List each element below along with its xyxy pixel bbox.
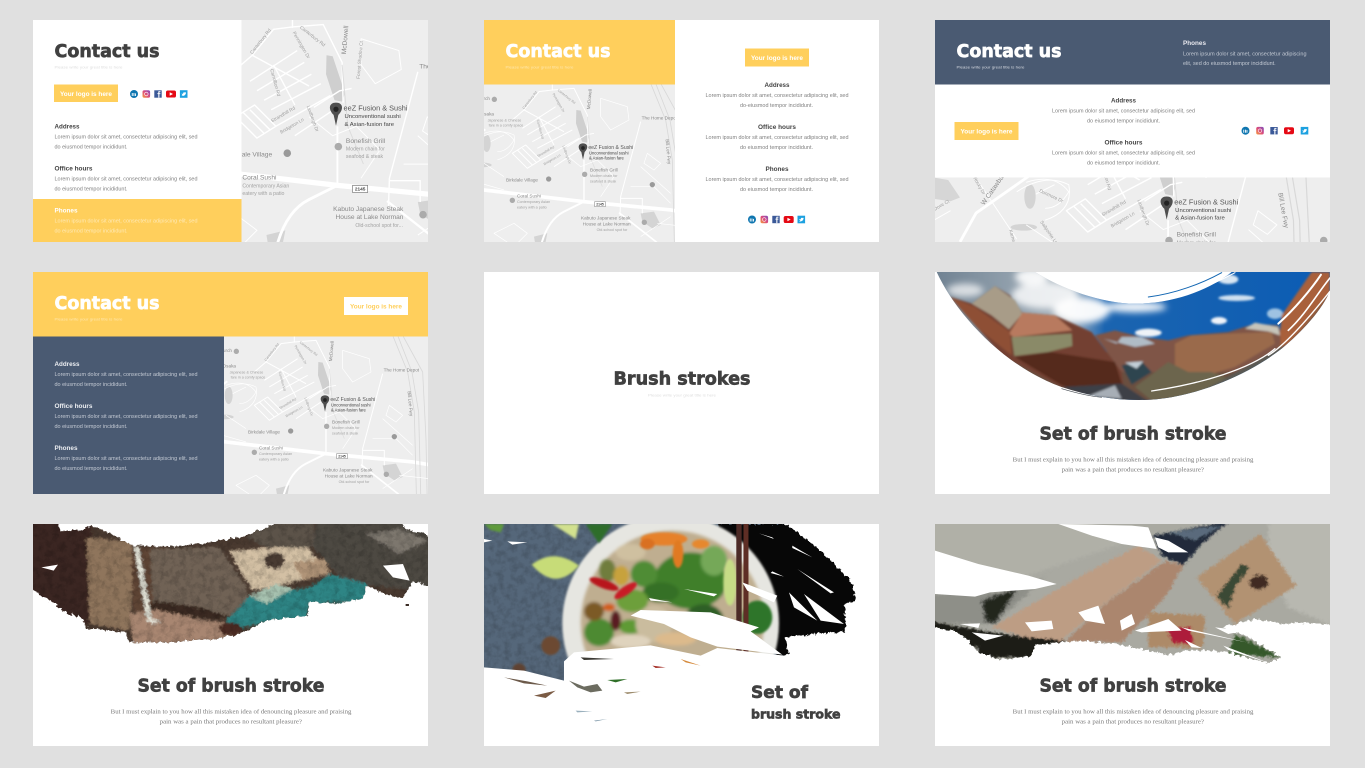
- map: Strandhill Rd: [270, 105, 297, 124]
- title: Set of brush stroke: [138, 676, 324, 696]
- photo: canyon in crescent brush stroke: [936, 272, 1330, 400]
- phones block: do eiusmod tempor incididunt.: [54, 466, 128, 472]
- map: [475, 84, 678, 242]
- logo badge: [344, 297, 408, 315]
- map: 2145: [596, 202, 604, 206]
- title: Contact us: [956, 41, 1062, 62]
- map: Osaka: [223, 363, 236, 368]
- office hours block: [54, 166, 198, 193]
- map: Canterbury Rd: [298, 25, 326, 49]
- social icons: [1242, 127, 1308, 135]
- map: Bridgeton Ln: [285, 405, 303, 418]
- map: Contemporary Asian: [242, 183, 289, 189]
- map: seafood & steak: [590, 179, 616, 183]
- map: Birkdale Village: [248, 429, 280, 434]
- phones block: do eiusmod tempor incididunt.: [740, 187, 813, 193]
- map: Carrollton Rd: [278, 371, 287, 391]
- map: Canterbury Rd: [299, 340, 318, 357]
- social icons: [748, 216, 805, 224]
- phones block: [1183, 40, 1307, 67]
- office hours block: Lorem ipsum dolor sit amet, consectetur adipiscing elit, sed: [54, 177, 198, 183]
- yellow header: [484, 20, 675, 84]
- map: McDowell: [586, 89, 593, 109]
- dark header: [935, 20, 1330, 84]
- title: Set of brush stroke: [1040, 424, 1226, 444]
- panel: contact slide with yellow header over map, centered details: [475, 20, 879, 242]
- logo badge: Your logo is here: [60, 91, 113, 98]
- map: W Catawba Ave: [980, 164, 1013, 207]
- map: Canterbury Rd: [249, 27, 273, 56]
- map: [217, 336, 428, 494]
- map: McDowell: [341, 25, 350, 55]
- office hours block: do eiusmod tempor incididunt.: [54, 187, 128, 193]
- panel: food bowl photo slide: [484, 524, 879, 746]
- photo: noodle bowl with ink brush stroke: [484, 524, 856, 722]
- panel: crescent canyon photo slide: [935, 272, 1330, 494]
- office hours block: Office hours: [1104, 139, 1143, 146]
- map: Strandhill Rd: [1101, 199, 1128, 218]
- address block: Lorem ipsum dolor sit amet, consectetur adipiscing elit, sed: [54, 372, 198, 378]
- panel: contact slide with dark header and map at bottom: [933, 20, 1330, 253]
- map: eeZ Fusion & Sushi: [1174, 198, 1239, 207]
- panel: blanket and legs photo slide: [935, 524, 1330, 746]
- map: The Home Depot: [642, 115, 678, 120]
- address block: Lorem ipsum dolor sit amet, consectetur adipiscing elit, sed: [706, 93, 849, 99]
- map: Unconventional sushi: [344, 114, 401, 120]
- map: Rocky Dr: [971, 176, 987, 196]
- description: pain was a pain that produces no resultant pleasure?: [1062, 466, 1204, 474]
- panel: brush strokes section title slide: [484, 272, 879, 494]
- map: Coral Sushi: [242, 175, 277, 182]
- phones block: elit, sed do eiusmod tempor incididunt.: [1183, 61, 1276, 67]
- map: House at Lake Norman: [336, 214, 404, 221]
- phones block: Lorem ipsum dolor sit amet, consectetur adipiscing elit, sed: [54, 219, 198, 225]
- address block: Address: [54, 361, 80, 368]
- map: seafood & steak: [346, 154, 384, 160]
- map: Bill Lee Fwy: [407, 391, 414, 417]
- office hours block: [1052, 139, 1195, 166]
- phones block: Phones: [54, 208, 78, 214]
- map: Modern chain for: [332, 426, 360, 430]
- map: Bonefish Grill: [1177, 232, 1216, 239]
- logo badge: Your logo is here: [751, 55, 804, 62]
- yellow phones band: [33, 199, 242, 242]
- map: Kabuto Japanese Steak: [581, 216, 631, 221]
- address block: do eiusmod tempor incididunt.: [1087, 119, 1160, 125]
- description: pain was a pain that produces no resultant pleasure?: [160, 718, 302, 726]
- phones block: Phones: [766, 166, 789, 173]
- address block: Lorem ipsum dolor sit amet, consectetur adipiscing elit, sed: [1052, 109, 1195, 115]
- map: Modern chain for: [1177, 240, 1216, 246]
- white brush wash: [484, 533, 879, 746]
- map: Japanese & Chinese: [488, 118, 521, 122]
- chopsticks: [736, 524, 742, 651]
- title: brush stroke: [751, 706, 840, 722]
- map: The Home Depot: [419, 64, 470, 71]
- office hours block: Lorem ipsum dolor sit amet, consectetur adipiscing elit, sed: [706, 135, 849, 141]
- panel: contact slide with yellow header, dark details column and map: [33, 272, 428, 494]
- map: [933, 162, 1330, 253]
- map: Coral Sushi: [259, 446, 283, 451]
- logo badge: [745, 48, 809, 66]
- map: 2145: [338, 454, 346, 458]
- map: Old-school spot for: [597, 228, 628, 232]
- office hours block: [706, 124, 849, 151]
- map: Unconventional sushi: [1175, 208, 1231, 214]
- map: eeZ Fusion & Sushi: [588, 145, 633, 151]
- description: pain was a pain that produces no resultant pleasure?: [1062, 718, 1204, 726]
- map: Strandhill Rd: [536, 145, 555, 158]
- office hours block: do eiusmod tempor incididunt.: [54, 424, 128, 430]
- map: Strandhill Rd: [278, 397, 297, 410]
- map: Birkdale Village: [506, 177, 538, 182]
- map: Forest Shadow Ct: [356, 40, 365, 79]
- map: Canterbury Rd: [522, 90, 538, 110]
- map: Lindbergh Dr: [305, 105, 320, 133]
- subtitle: Please write your great title is here: [506, 65, 574, 70]
- map: Unconventional sushi: [331, 402, 371, 407]
- address block: [706, 82, 849, 109]
- title: Set of: [751, 683, 809, 703]
- brush fragments: [504, 657, 701, 721]
- title: Set of brush stroke: [1040, 676, 1226, 696]
- map: Bill Lee Fwy: [665, 139, 672, 165]
- map: Canterbury Rd: [264, 342, 280, 362]
- photo: coastline in brush stroke: [33, 524, 428, 644]
- map: Dove Ct: [933, 198, 951, 212]
- address block: Address: [1111, 98, 1136, 104]
- yellow header: [33, 272, 428, 336]
- address block: Address: [54, 124, 80, 130]
- map: Bill Lee Fwy: [1276, 192, 1290, 229]
- subtitle: Please write your great title is here: [956, 65, 1025, 70]
- map: The Home Depot: [384, 367, 420, 372]
- panel: contact slide with map right and yellow phones band: [33, 20, 470, 242]
- logo badge: Your logo is here: [350, 304, 403, 311]
- phones block: [54, 208, 198, 235]
- map: Osaka: [481, 111, 494, 116]
- phones block: Phones: [1183, 40, 1206, 47]
- map: Lindbergh Dr: [303, 397, 314, 417]
- dark details column: [33, 336, 224, 494]
- map: Canterbury Rd: [557, 88, 576, 105]
- map: Bonefish Grill: [590, 168, 618, 173]
- map: Church: [217, 348, 232, 353]
- address block: [54, 124, 198, 151]
- map: 2145: [355, 187, 366, 193]
- map: Contemporary Asian: [259, 452, 292, 456]
- map: Bridgeton Ln: [1110, 211, 1136, 229]
- map: Pennington Dr: [293, 344, 308, 366]
- map: Japanese & Chinese: [230, 370, 263, 374]
- logo badge: Your logo is here: [960, 128, 1013, 136]
- map: & Asian-fusion fare: [331, 408, 367, 413]
- map: eeZ Fusion & Sushi: [330, 397, 375, 403]
- title: [751, 683, 840, 722]
- description: [111, 708, 352, 726]
- map: Birkdale Village: [227, 152, 272, 159]
- map: Sailpointe Ln: [1038, 220, 1059, 246]
- map: Kabuto Japanese Steak: [333, 206, 404, 213]
- map: Pennington Dr: [551, 92, 566, 114]
- social icons: [130, 90, 188, 98]
- address block: do eiusmod tempor incididunt.: [54, 382, 128, 388]
- title: Contact us: [506, 41, 610, 62]
- address block: Lorem ipsum dolor sit amet, consectetur adipiscing elit, sed: [54, 135, 198, 141]
- logo badge: [54, 84, 118, 102]
- subtitle: Please write your great title is here: [648, 392, 717, 397]
- map: Carrollton Rd: [1099, 162, 1112, 191]
- phones block: Phones: [54, 445, 78, 452]
- description: [1013, 456, 1254, 474]
- map: Bonefish Grill: [332, 420, 360, 425]
- map: Old-school spot for...: [355, 223, 403, 229]
- map: Modern chain for: [346, 146, 385, 152]
- map: Bonefish Grill: [346, 138, 386, 145]
- map: & Asian-fusion fare: [1175, 216, 1225, 222]
- office hours block: do eiusmod tempor incididunt.: [1087, 160, 1160, 166]
- map: & Asian-fusion fare: [344, 122, 395, 128]
- white brush strokes: [935, 524, 1270, 663]
- map: Carrollton Rd: [536, 119, 545, 139]
- map: eatery with a patio: [517, 205, 547, 209]
- photo: legs on blanket with brush stroke: [935, 524, 1330, 664]
- office hours block: Office hours: [54, 403, 93, 410]
- phones block: Lorem ipsum dolor sit amet, consectetur adipiscing elit, sed: [54, 456, 198, 462]
- map: Lindbergh Dr: [561, 145, 572, 165]
- map: House at Lake Norman: [583, 221, 631, 226]
- map: Modern chain for: [590, 174, 618, 178]
- panel: waterfall coast photo slide: [33, 524, 428, 746]
- map: Unconventional sushi: [589, 150, 629, 155]
- address block: [1052, 98, 1195, 125]
- map: Bridgeton Ln: [543, 153, 561, 166]
- map: [227, 20, 470, 242]
- map: Lindbergh Dr: [1135, 199, 1151, 227]
- office hours block: Lorem ipsum dolor sit amet, consectetur adipiscing elit, sed: [54, 414, 198, 420]
- map: Coral Sushi: [517, 194, 541, 199]
- map: McDowell: [328, 341, 335, 361]
- paint flecks: [41, 564, 410, 581]
- ink: [717, 524, 856, 657]
- description: But I must explain to you how all this mistaken idea of denouncing pleasure and praising: [1013, 456, 1254, 464]
- map: Karnes Rd: [1007, 229, 1019, 253]
- description: But I must explain to you how all this mistaken idea of denouncing pleasure and praising: [111, 708, 352, 716]
- map: eatery with a patio: [242, 191, 285, 197]
- map: Church: [475, 96, 490, 101]
- description: [1013, 708, 1254, 726]
- title: Brush strokes: [614, 368, 750, 390]
- map: Old-school spot for: [339, 480, 370, 484]
- office hours block: Lorem ipsum dolor sit amet, consectetur adipiscing elit, sed: [1052, 150, 1195, 156]
- address block: do eiusmod tempor incididunt.: [54, 145, 128, 151]
- map: Kabuto Japanese Steak: [323, 468, 373, 473]
- address block: Address: [764, 82, 790, 89]
- white strokes: [1062, 273, 1330, 397]
- phones block: Lorem ipsum dolor sit amet, consectetur adipiscing: [1183, 52, 1307, 58]
- map: & Asian-fusion fare: [589, 156, 625, 161]
- subtitle: Please write your great title is here: [54, 65, 123, 70]
- map: Contemporary Asian: [517, 200, 550, 204]
- office hours block: do eiusmod tempor incididunt.: [740, 145, 813, 151]
- office hours block: Office hours: [54, 166, 93, 172]
- map: Pennington Dr: [291, 31, 311, 60]
- logo badge: [954, 122, 1018, 140]
- phones block: Lorem ipsum dolor sit amet, consectetur adipiscing elit, sed: [706, 177, 849, 183]
- map: seafood & steak: [332, 431, 358, 435]
- phones block: do eiusmod tempor incididunt.: [54, 229, 128, 235]
- subtitle: Please write your great title is here: [54, 317, 123, 322]
- phones block: [54, 445, 198, 472]
- address block: [54, 361, 198, 388]
- map: eatery with a patio: [259, 457, 289, 461]
- address block: do-eiusmod tempor incididunt.: [740, 103, 813, 109]
- map: fare in a comfy space: [231, 375, 265, 379]
- phones block: [706, 166, 849, 193]
- description: But I must explain to you how all this mistaken idea of denouncing pleasure and praising: [1013, 708, 1254, 716]
- map: House at Lake Norman: [325, 473, 373, 478]
- map: Bridgeton Ln: [279, 117, 306, 136]
- office hours block: [54, 403, 198, 430]
- map: Dunmore Dr: [1038, 188, 1064, 205]
- map: Carrollton Rd: [268, 68, 281, 97]
- title: Contact us: [54, 41, 160, 62]
- map: fare in a comfy space: [489, 123, 523, 127]
- title: Contact us: [54, 293, 160, 314]
- map: eeZ Fusion & Sushi: [344, 104, 408, 113]
- office hours block: Office hours: [758, 124, 796, 131]
